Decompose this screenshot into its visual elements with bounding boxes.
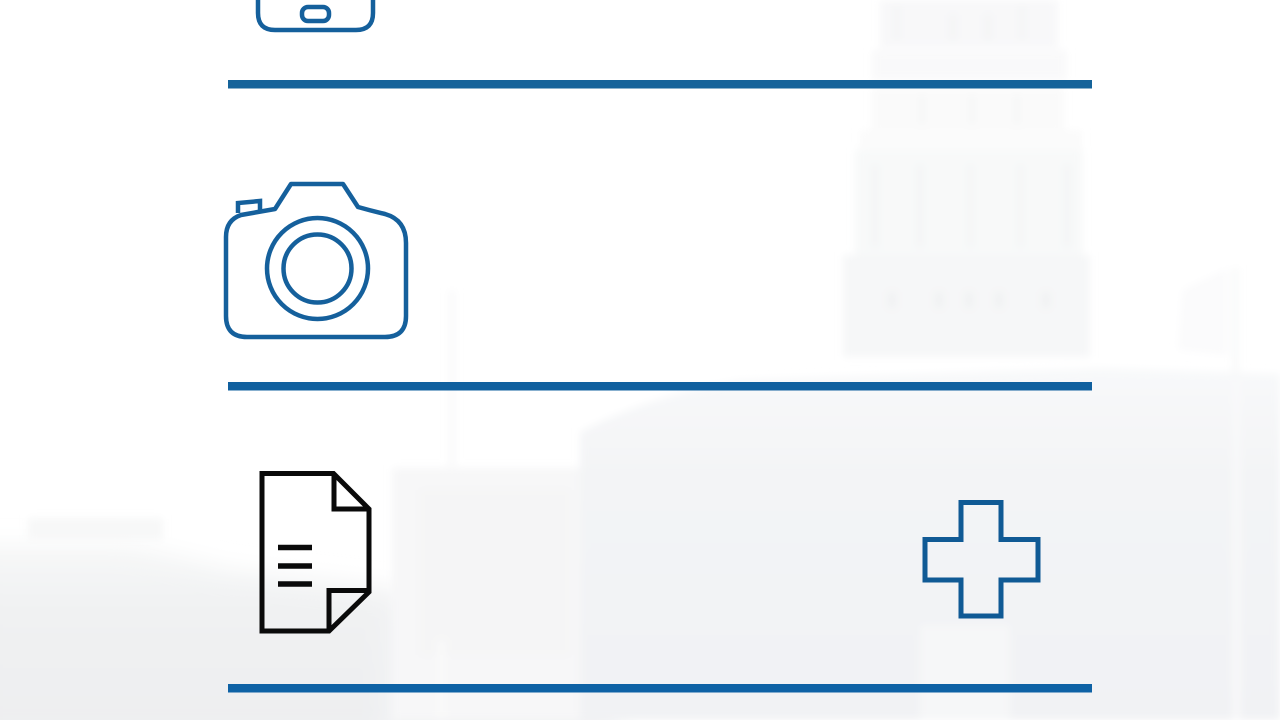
flag: [1178, 268, 1228, 355]
lower facade: [920, 625, 1010, 720]
divider line 2: [228, 382, 1092, 390]
dome tiers: [843, 255, 1090, 357]
divider line 1: [228, 80, 1092, 88]
icon: camera: [226, 184, 406, 337]
icon: phone bottom: [258, 0, 373, 30]
left city haze: [0, 545, 620, 720]
icon: document: [262, 474, 369, 631]
icon: medical cross: [925, 502, 1038, 616]
divider line 3: [228, 684, 1092, 692]
left flagpole: [449, 290, 455, 470]
